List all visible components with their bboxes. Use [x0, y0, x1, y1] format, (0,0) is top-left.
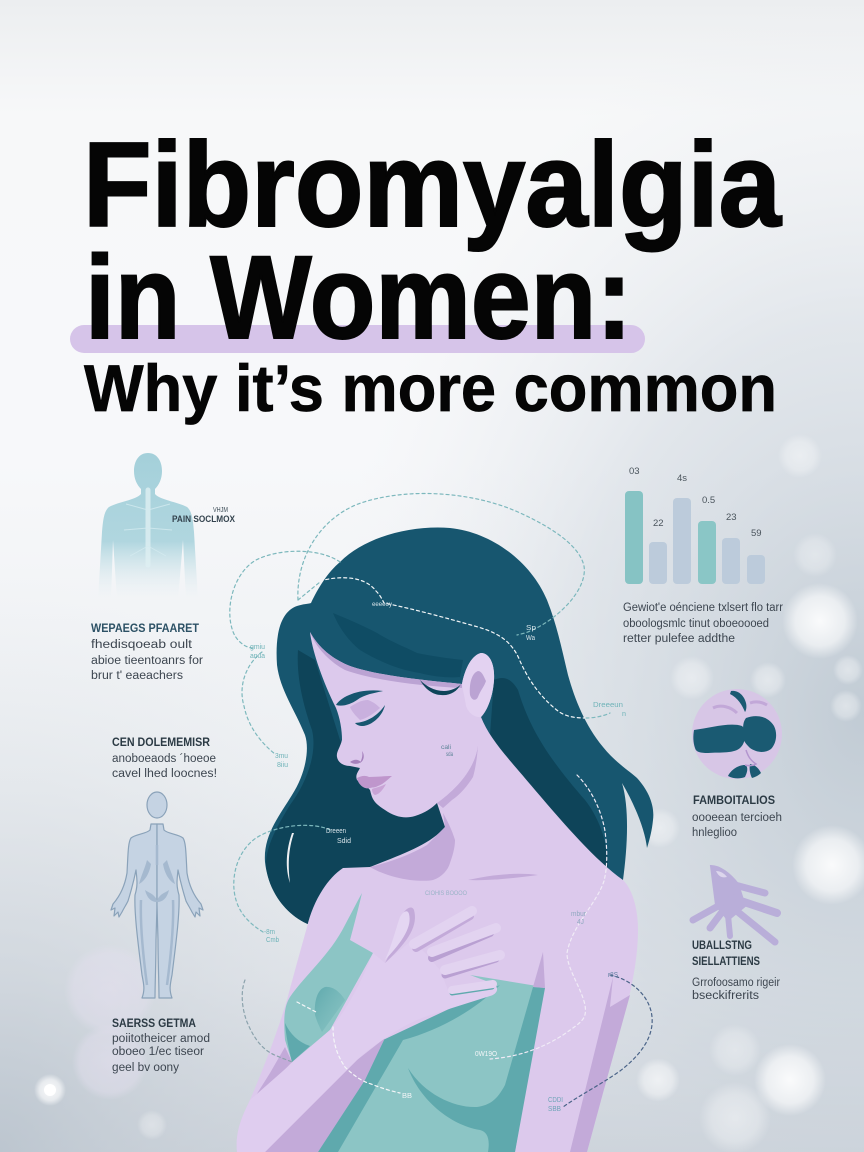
teal top main [318, 975, 543, 1152]
text block: left 3: geel bv oony [112, 1062, 179, 1074]
label: pain scale: VHJM [213, 507, 228, 514]
bar chart: 0.5 [702, 495, 715, 506]
small annotation labels: mbur [571, 911, 587, 918]
small annotation labels: gmiu [250, 644, 265, 651]
small annotation labels: 3mu [275, 753, 288, 760]
text block: left 2: CEN DOLEMEMISR [112, 737, 211, 749]
text block: left 3: SAERSS GETMA [112, 1018, 196, 1030]
illustration: woman [237, 528, 653, 1152]
arm shadow band [265, 1038, 385, 1152]
fringe dark strip [333, 613, 463, 677]
small annotation labels: CIOHIS BOOOO [425, 890, 467, 897]
teal band under arm [318, 985, 500, 1152]
bar chart: 22 [653, 518, 664, 529]
bar chart: 03 [629, 466, 640, 477]
small annotation labels: CDDI [548, 1097, 563, 1104]
text block: right 1 [692, 795, 782, 839]
text block: left 2: anoboeaods ´hoeoe [112, 753, 216, 765]
small annotation labels: Sdid [337, 838, 351, 845]
small annotation labels: eeeeoy [372, 602, 392, 608]
neck shadow upper [437, 745, 478, 808]
eyeshadow [350, 700, 380, 720]
text block: left 2: cavel lhed loocnes! [112, 768, 217, 780]
small annotation labels: Cmb [266, 937, 279, 944]
teal top left [284, 893, 373, 1062]
text block: right 1: FAMBOITALIOS [693, 795, 775, 807]
text block: chart caption: retter pulefee addthe [623, 633, 735, 645]
closed eye under hair [420, 680, 461, 695]
small annotation labels: n [622, 711, 626, 718]
title: in Women: [85, 232, 632, 364]
text block: left 3 [112, 1018, 210, 1074]
dashed connector lines [230, 494, 652, 1107]
bar chart: 4s [677, 473, 687, 484]
text block: chart caption: Gewiot'e oénciene txlsert flo tarr [623, 602, 783, 614]
nose shadow [350, 751, 364, 764]
text block: right 2: Grrofoosamo rigeir [692, 977, 780, 989]
small annotation labels: -8m [264, 929, 275, 936]
text block: right 1: oooeean tercioeh [692, 812, 782, 824]
chest sliver [533, 952, 545, 988]
ear [462, 653, 494, 717]
fingers [385, 908, 500, 993]
hair back [265, 528, 653, 960]
hair band under fringe [310, 632, 462, 688]
text block: left 1: brur t' eaeachers [91, 670, 183, 682]
bar chart: 59 [751, 528, 762, 539]
icon: circle with close-up face [692, 689, 782, 779]
hair shadow left of face [266, 650, 450, 925]
title [83, 118, 782, 425]
body right shadow [570, 977, 630, 1152]
small annotation labels: cali [441, 745, 451, 751]
title highlight bar [70, 325, 645, 353]
icon: lavender pain splat [693, 866, 777, 942]
small annotation labels: SBB [548, 1106, 561, 1113]
small annotation labels: 0W19O [475, 1051, 498, 1058]
hand and arm [237, 940, 497, 1152]
title: Why it’s more common [84, 351, 777, 425]
text block: left 1: fhedisqoeab oult [91, 639, 193, 651]
text block: left 3: oboeo 1/ec tiseor [112, 1046, 204, 1058]
text block: left 2 [112, 737, 217, 780]
text block: left 3: poiitotheicer amod [112, 1033, 210, 1045]
text block: left 1: WEPAEGS PFAARET [91, 623, 199, 635]
eye [355, 705, 385, 726]
small annotation labels: anua [250, 653, 265, 660]
text block: right 1: hnleglioo [692, 827, 737, 839]
small annotation labels: 4J [577, 919, 584, 926]
icon: male figure with spine [98, 453, 198, 600]
small annotation labels: r8S [608, 972, 618, 979]
text block: right 2: SIELLATTIENS [692, 956, 760, 968]
hair strand highlight [287, 833, 294, 883]
face [310, 632, 494, 817]
neck shadow lower [370, 813, 455, 881]
small annotation labels: Sp [526, 625, 536, 632]
small annotation labels: Wa [526, 635, 535, 642]
bar chart [625, 466, 765, 584]
lips [357, 776, 392, 788]
left arm shadow [248, 1047, 292, 1108]
text block: left 1 [91, 623, 203, 682]
hair shadow right of neck [490, 678, 608, 870]
text block: right 2: UBALLSTNG [692, 940, 752, 952]
icon: female body figure [111, 792, 203, 998]
teal shadow under chest [408, 987, 545, 1152]
collarbone [468, 874, 538, 880]
eyebrow [336, 690, 383, 706]
label: pain scale: PAIN SOCLMOX [172, 514, 235, 524]
text block: right 2 [692, 940, 780, 1002]
body [237, 717, 638, 1152]
text block: left 1: abioe tieentoanrs for [91, 655, 203, 667]
text block: chart caption [623, 602, 783, 645]
small annotation labels [250, 602, 626, 1113]
title: Fibromyalgia [83, 118, 782, 252]
small annotation labels: 8iiu [277, 762, 288, 769]
small annotation labels: BB [402, 1093, 412, 1100]
small annotation labels: Dreeeun [593, 702, 623, 709]
bar chart: 23 [726, 512, 737, 523]
text block: chart caption: oboologsmlc tinut oboeoooed [623, 618, 769, 630]
small annotation labels: sda [446, 752, 453, 758]
text block: right 2: bseckifrerits [692, 990, 759, 1002]
label: pain scale [172, 507, 235, 524]
small annotation labels: Dreeen [326, 828, 346, 835]
